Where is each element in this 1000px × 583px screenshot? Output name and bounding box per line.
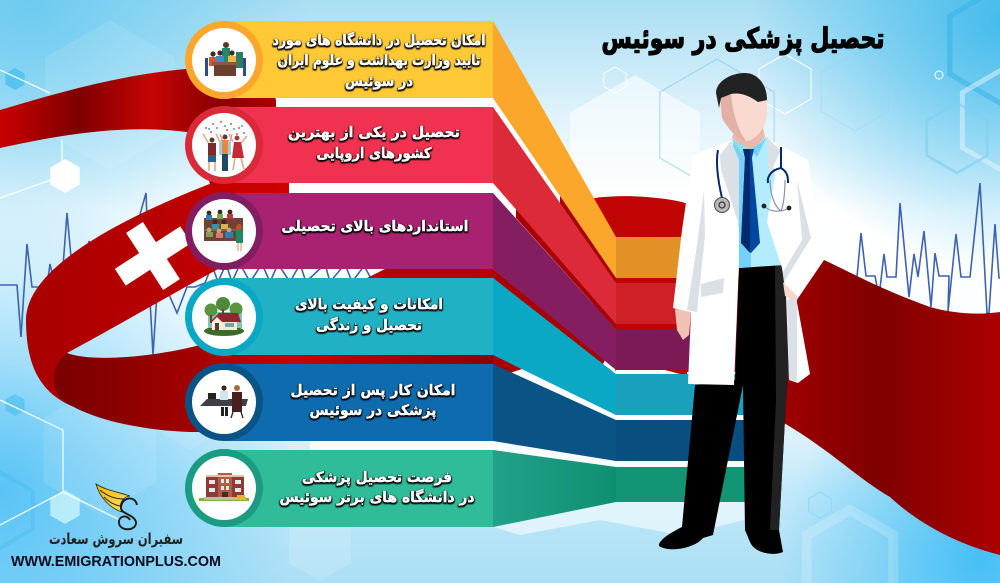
band 3: purple bbox=[224, 193, 745, 370]
logo bbox=[11, 484, 221, 570]
title: تحصیل پزشکی در سوئیس bbox=[602, 22, 884, 55]
chart: right heartbeat line bbox=[857, 183, 1000, 313]
text: band 2 bbox=[288, 125, 460, 162]
doctor figure bbox=[659, 73, 822, 554]
band 5: blue bbox=[224, 364, 745, 461]
text: band 1: تایید وزارت بهداشت و علوم ایران bbox=[278, 53, 480, 69]
icon circle 5: doctor and patient at desk bbox=[185, 363, 263, 441]
text: band 1 bbox=[272, 31, 486, 90]
chart: left heartbeat line bbox=[0, 193, 372, 355]
text: band 4 bbox=[295, 297, 443, 334]
text: band 1: در سوئیس bbox=[345, 74, 413, 90]
icon circle 2: celebrating people bbox=[185, 106, 263, 184]
flat white strips bbox=[616, 370, 746, 467]
text: band 2: کشورهای اروپایی bbox=[316, 146, 432, 162]
ribbon: lower dark curve bbox=[54, 345, 525, 432]
icon circle 3: classroom bbox=[185, 192, 263, 270]
neck bbox=[732, 128, 765, 155]
band 6: green bbox=[224, 450, 745, 527]
icon: golden wing and swan bbox=[96, 484, 137, 529]
band 1: yellow bbox=[224, 21, 745, 278]
icon circle 1: meeting bbox=[185, 21, 263, 99]
text: band 5: امکان کار پس از تحصیل bbox=[290, 383, 456, 399]
band 2: red bbox=[224, 107, 745, 324]
ribbon: right large red bbox=[784, 260, 1000, 555]
coat left bbox=[673, 141, 739, 385]
shirt bbox=[733, 138, 784, 268]
hand right bbox=[783, 282, 796, 300]
collar bbox=[731, 139, 752, 158]
text: band 3: استانداردهای بالای تحصیلی bbox=[282, 219, 468, 235]
band 4: teal bbox=[224, 278, 745, 415]
face bbox=[720, 92, 767, 141]
ribbon: red behind flat bands bbox=[560, 196, 745, 372]
tie bbox=[741, 149, 760, 253]
hand left bbox=[675, 309, 691, 340]
text: band 2: تحصیل در یکی از بهترین bbox=[288, 125, 460, 141]
coat right bbox=[767, 139, 822, 383]
text: band 4: امکانات و کیفیت بالای bbox=[295, 297, 443, 313]
ribbon: dark red fold strips bbox=[367, 188, 687, 374]
hair bbox=[716, 73, 767, 108]
text: band 6: فرصت تحصیل پزشکی bbox=[302, 470, 452, 486]
icon: white cross bbox=[102, 206, 204, 306]
text: band 6 bbox=[280, 470, 474, 506]
trouser shade bbox=[770, 265, 795, 530]
text: band 6: در دانشگاه های برتر سوئیس bbox=[280, 488, 474, 506]
stethoscope bbox=[714, 147, 791, 212]
text: band 5: پزشکی در سوئیس bbox=[310, 403, 436, 419]
ribbon: upper left bbox=[0, 68, 290, 195]
icon circle 4: house and trees bbox=[185, 278, 263, 356]
white gaps between bands bbox=[276, 98, 745, 535]
text: band 4: تحصیل و زندگی bbox=[316, 316, 422, 334]
ribbon: main curve with Swiss cross bbox=[26, 183, 300, 408]
trousers bbox=[659, 265, 795, 554]
text: band 5 bbox=[290, 383, 456, 419]
face shade bbox=[720, 93, 746, 141]
icon circle 6: university building bbox=[185, 449, 263, 527]
website: WWW.EMIGRATIONPLUS.COM bbox=[11, 553, 221, 570]
coat shading bbox=[687, 139, 811, 381]
text: band 1: امکان تحصیل در دانشگاه های مورد bbox=[272, 31, 486, 49]
brand name: سفیران سروش سعادت bbox=[49, 530, 183, 548]
